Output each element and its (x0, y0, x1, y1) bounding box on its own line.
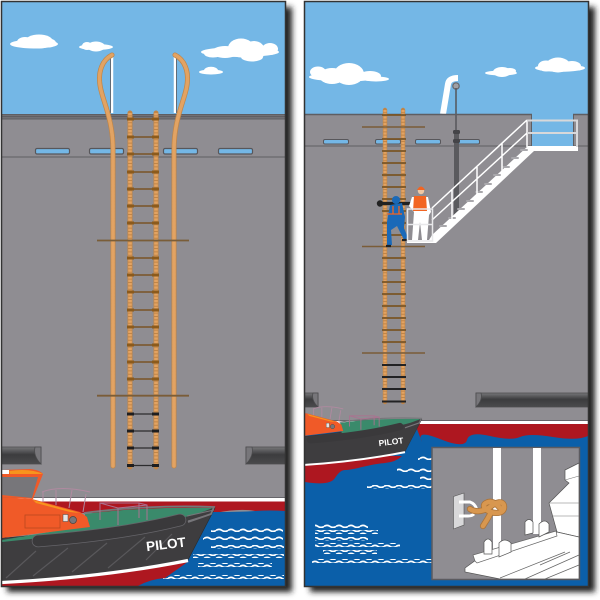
waterline stripe (2, 497, 285, 498)
stanchions (110, 57, 176, 113)
accommodation fall pipe (453, 130, 460, 220)
black rungs (382, 365, 406, 402)
panel: pilot transfer (288, 2, 589, 586)
windows (324, 140, 480, 144)
fenders (304, 393, 589, 407)
deck band (305, 114, 588, 116)
rear railing (313, 407, 343, 422)
hard hat (418, 188, 424, 194)
hull panels (6, 534, 172, 578)
boat name: PILOT (378, 435, 405, 448)
panel border left (2, 2, 286, 586)
cabin trim (307, 414, 337, 422)
basket (408, 209, 432, 241)
wooden rungs (134, 118, 152, 380)
pilot climbing (377, 196, 412, 246)
deck plate (465, 532, 579, 579)
windows (36, 148, 252, 154)
sky (2, 2, 285, 114)
cabin trim (33, 500, 80, 513)
inset: ladder securing point (432, 448, 580, 580)
boat name: PILOT (145, 534, 187, 554)
black rungs (127, 414, 159, 466)
vest (413, 196, 427, 211)
hull stripe (305, 420, 588, 421)
gunwale (339, 418, 421, 428)
waves (163, 528, 284, 579)
ship structure (549, 463, 579, 537)
clouds (309, 58, 585, 85)
head (392, 196, 400, 204)
roof trim (9, 470, 43, 474)
gunwale (84, 506, 214, 522)
rubbing strake (310, 427, 400, 440)
green deck (2, 508, 213, 542)
davit (443, 78, 459, 132)
rear railing (42, 488, 90, 512)
u-bolt (459, 502, 477, 516)
pilot boat (2, 469, 215, 587)
ship hull deck band (2, 115, 285, 118)
boot topping (42, 502, 285, 513)
cabin roof (2, 469, 43, 499)
handrails (432, 120, 577, 222)
man ropes (100, 55, 188, 466)
boot topping and water (305, 424, 588, 586)
cabin (2, 497, 90, 538)
rope knot (470, 502, 504, 526)
body (387, 203, 408, 245)
eye plate (454, 493, 464, 529)
boat hull (2, 508, 215, 583)
stair treads (440, 150, 527, 226)
boat stripe (288, 452, 405, 466)
wooden rungs (382, 115, 406, 342)
windshield (2, 477, 38, 498)
pilot boat (288, 407, 422, 466)
panel: ladder overview (1, 2, 286, 587)
ladder (382, 110, 406, 402)
coverall (409, 197, 431, 240)
crew member (409, 186, 431, 240)
sky (305, 2, 588, 114)
bag (379, 202, 412, 205)
boat red bottom (2, 561, 189, 587)
panel border right (304, 2, 588, 586)
lugs (484, 520, 549, 557)
deck rail (100, 503, 147, 525)
porthole (63, 514, 76, 524)
fenders (1, 447, 286, 464)
deck rail (350, 416, 379, 430)
spreaders (362, 127, 425, 353)
pilot ladder (127, 113, 159, 467)
spreaders (97, 240, 189, 396)
pillars (493, 448, 541, 552)
cabin (288, 412, 343, 438)
clouds (10, 34, 279, 74)
deck opening (532, 114, 573, 146)
green deck (340, 419, 421, 435)
door (25, 515, 60, 528)
boat stripe (2, 560, 188, 582)
bow lines (187, 510, 214, 521)
harness (387, 206, 402, 214)
porthole (326, 423, 335, 429)
accommodation ladder stringer (407, 146, 578, 243)
waves (312, 456, 432, 563)
water (130, 510, 285, 586)
boat red bottom (305, 455, 402, 483)
rubbing strake (38, 520, 180, 541)
boat hull (288, 419, 422, 466)
